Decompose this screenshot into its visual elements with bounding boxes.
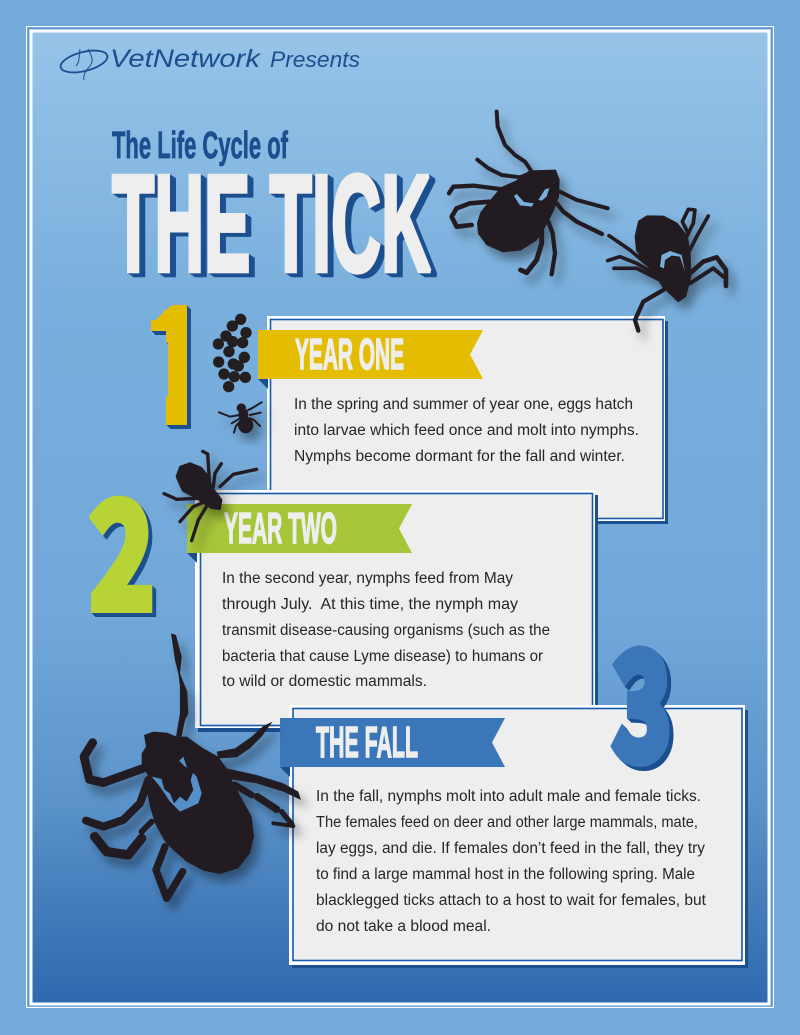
body text: blacklegged ticks attach to a host to wait for females, but (316, 892, 707, 909)
body text: to find a large mammal host in the following spring. Male (316, 866, 695, 883)
body text: lay eggs, and die. If females don’t feed in the fall, they try (316, 840, 705, 857)
number 1: 1 (152, 242, 202, 468)
number 3: 3 (613, 591, 671, 802)
body text (294, 396, 639, 465)
panel: the fall (280, 705, 748, 968)
body text (222, 570, 550, 690)
body text: to wild or domestic mammals. (222, 673, 427, 690)
body text: In the spring and summer of year one, eggs hatch (294, 396, 633, 413)
presents: Presents (270, 47, 360, 72)
logo wordmark: VetNetwork (110, 45, 262, 73)
subtitle: The Life Cycle of (112, 125, 288, 167)
number 2: 2 (90, 440, 154, 651)
icon: adult tick, upper right (608, 209, 726, 331)
panel: year one (258, 316, 668, 524)
card (267, 316, 668, 524)
body text: transmit disease-causing organisms (such as the (222, 622, 550, 639)
panel: year two (187, 490, 598, 732)
body text: Nymphs become dormant for the fall and winter. (294, 448, 625, 465)
ribbon: THE FALL (316, 718, 418, 767)
body text: do not take a blood meal. (316, 918, 491, 935)
icon: VetNetwork logo (58, 46, 110, 80)
ribbon (258, 330, 483, 389)
ribbon: YEAR TWO (224, 504, 337, 553)
ribbon (280, 718, 505, 777)
ribbon: YEAR ONE (295, 330, 404, 379)
body text: The females feed on deer and other large mammals, mate, (316, 814, 698, 831)
body text: In the second year, nymphs feed from May (222, 570, 513, 587)
number 1 (151, 305, 191, 429)
body text: In the fall, nymphs molt into adult male and female ticks. (316, 788, 701, 805)
icon: nymph tick (164, 451, 257, 541)
icon: larva (219, 402, 262, 433)
body text: into larvae which feed once and molt into nymphs. (294, 422, 639, 439)
card (195, 490, 598, 732)
body text: bacteria that cause Lyme disease) to humans or (222, 648, 543, 665)
icon: large adult tick (84, 633, 301, 898)
card (289, 705, 748, 968)
logo: VetNetwork Presents (58, 45, 360, 80)
body text: through July. At this time, the nymph may (222, 596, 518, 613)
main title: THE TICK (112, 147, 431, 301)
title (112, 125, 431, 301)
ribbon (187, 504, 412, 563)
body text (316, 788, 707, 935)
icon: tick eggs (213, 314, 252, 392)
icon: adult tick, upper left (449, 112, 608, 274)
